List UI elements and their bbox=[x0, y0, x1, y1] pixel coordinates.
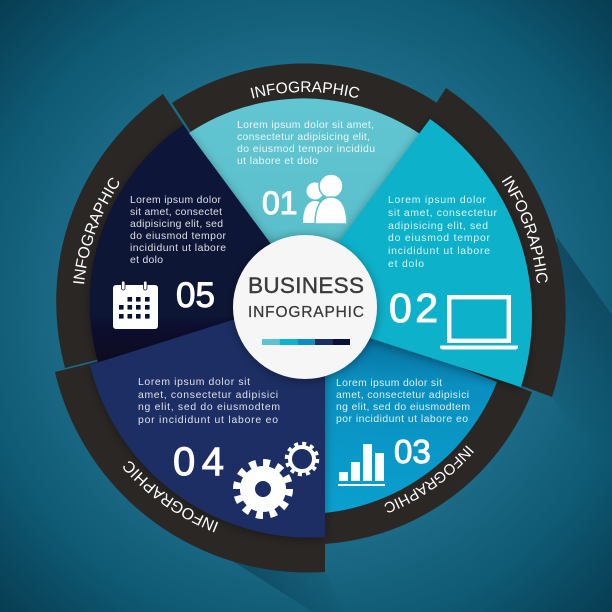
icon: laptop bbox=[440, 297, 518, 350]
panel 1 text: Lorem ipsum dolor sit amet, bbox=[237, 120, 374, 131]
icon: gears bbox=[237, 444, 317, 515]
panel 3 text: ng elit, sed do eiusmodtem bbox=[336, 402, 470, 413]
ring segment 4 bbox=[55, 306, 325, 573]
panel 1 text bbox=[237, 120, 375, 167]
panel 2 text: do eiusmod tempor bbox=[388, 233, 491, 244]
panel 2 text: sit amet, consectetur bbox=[388, 208, 498, 219]
wedge 1 bbox=[175, 98, 420, 306]
icon: calendar bbox=[113, 281, 158, 329]
colour key bar bbox=[262, 339, 350, 345]
panel 2 text: et dolo bbox=[388, 259, 424, 270]
panel 5 text: adipisicing elit, sed bbox=[130, 219, 223, 230]
number 02: 02 bbox=[389, 285, 438, 331]
panel 1 text: consectetur adipisicing elit, bbox=[237, 132, 370, 143]
wedge 3 bbox=[305, 306, 497, 513]
panel 3 text: amet, consectetur adipisici bbox=[336, 390, 469, 401]
ring segment 1 bbox=[172, 64, 437, 306]
number 01: 01 bbox=[262, 185, 298, 221]
center circle bbox=[233, 235, 377, 379]
panel 1 text: ut labore et dolo bbox=[237, 156, 318, 167]
number 03: 03 bbox=[394, 433, 431, 470]
panel 4 text: amet, consectetur adipisici bbox=[138, 390, 278, 401]
panel 2 text bbox=[388, 195, 498, 270]
wedge 2 bbox=[305, 119, 532, 387]
center title: BUSINESS bbox=[248, 273, 364, 298]
wedge 4 bbox=[90, 297, 325, 538]
panel 2 text: adipisicing elit, sed bbox=[388, 221, 488, 232]
ring label: bottom left: INFOGRAPHIC bbox=[123, 461, 218, 532]
panel 5 text: incididunt ut labore bbox=[130, 243, 226, 254]
panel 5 text: sit amet, consectet bbox=[130, 207, 222, 218]
ring segment 5 bbox=[56, 94, 305, 368]
icon: bar chart bbox=[338, 444, 385, 486]
center subtitle: INFOGRAPHIC bbox=[248, 304, 364, 321]
panel 5 text: do eiusmod tempor bbox=[130, 231, 227, 242]
panel 4 text: por incididunt ut labore eo bbox=[138, 415, 278, 426]
panel 5 text bbox=[130, 195, 227, 266]
number 05: 05 bbox=[176, 276, 215, 315]
panel 3 text: por incididunt ut labore eo bbox=[336, 414, 468, 425]
panel 4 text bbox=[138, 377, 280, 426]
ring segment 2 bbox=[305, 88, 566, 397]
number 04: 04 bbox=[173, 440, 224, 484]
long shadow: right segment bbox=[552, 237, 612, 480]
panel 4 text: ng elit, sed do eiusmodtem bbox=[138, 402, 280, 413]
ring label: top: INFOGRAPHIC bbox=[250, 81, 360, 98]
panel 5 text: Lorem ipsum dolor bbox=[130, 195, 222, 206]
panel 2 text: incididunt ut labore bbox=[388, 246, 490, 257]
panel 2 text: Lorem ipsum dolor bbox=[388, 195, 487, 206]
ring segments bbox=[55, 64, 566, 573]
panel 1 text: do eiusmod tempor incididu bbox=[237, 144, 375, 155]
icon: people bbox=[303, 174, 347, 224]
wedge 5 bbox=[90, 125, 305, 362]
ring label: bottom right: INFOGRAPHIC bbox=[384, 445, 474, 512]
panel 4 text: Lorem ipsum dolor sit bbox=[138, 377, 250, 388]
panel 3 text bbox=[336, 378, 470, 425]
panel 5 text: et dolo bbox=[130, 255, 163, 266]
panel 3 text: Lorem ipsum dolor sit bbox=[336, 378, 442, 389]
ring label: right: INFOGRAPHIC bbox=[502, 176, 548, 284]
ring segment 3 bbox=[305, 306, 532, 544]
long shadow: bottom segment bbox=[220, 553, 345, 612]
ring label: left: INFOGRAPHIC bbox=[73, 178, 120, 284]
